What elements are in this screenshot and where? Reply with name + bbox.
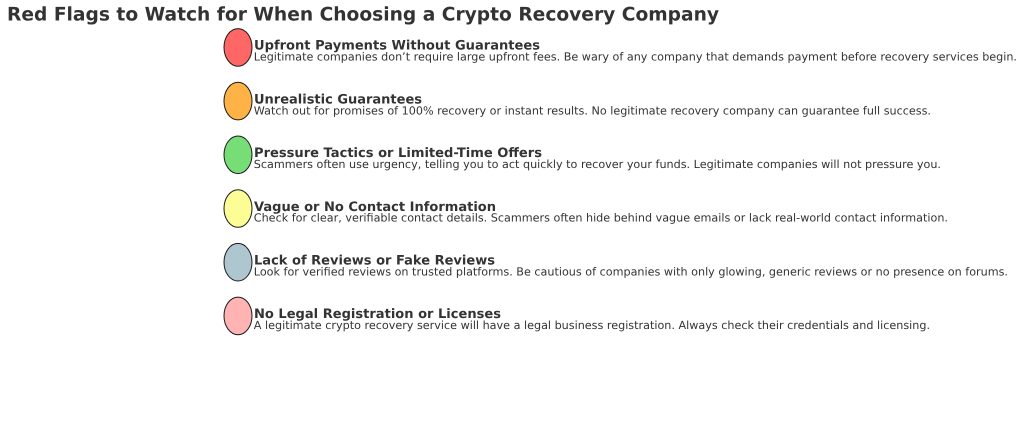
icon: yellow circle: [224, 190, 252, 227]
panel: vague contact information: [224, 190, 948, 227]
panel: pressure tactics: [224, 136, 941, 174]
description: unrealistic guarantees: Watch out for promises of 100% recovery or instant results. No legitimate recovery company can guarantee full success.: [254, 104, 931, 117]
icon: orange circle: [224, 82, 252, 120]
description: legal registration: A legitimate crypto recovery service will have a legal business registration. Always check their credentials and licensing.: [254, 319, 930, 332]
panel: unrealistic guarantees: [224, 82, 931, 120]
description: vague contact information: Check for clear, verifiable contact details. Scammers often hide behind vague emails or lack real-world contact information.: [254, 212, 948, 225]
title: Red Flags to Watch for When Choosing a Crypto Recovery Company: [7, 5, 719, 26]
heading: unrealistic guarantees: Unrealistic Guarantees: [254, 92, 422, 107]
heading: pressure tactics: Pressure Tactics or Limited-Time Offers: [254, 146, 542, 161]
description: reviews: Look for verified reviews on trusted platforms. Be cautious of companies with only glowing, generic reviews or no presence on forums.: [254, 265, 1008, 278]
description: pressure tactics: Scammers often use urgency, telling you to act quickly to recover your funds. Legitimate companies will not pressure you.: [254, 158, 941, 171]
description: upfront payments: Legitimate companies don’t require large upfront fees. Be wary of any company that demands payment before recovery services begin.: [254, 51, 1017, 64]
icon: red circle: [224, 29, 252, 66]
heading: legal registration: No Legal Registration or Licenses: [254, 307, 501, 322]
icon: pink circle: [224, 297, 252, 335]
panel: reviews: [224, 243, 1008, 281]
icon: blue-grey circle: [224, 243, 252, 281]
icon: green circle: [224, 136, 252, 174]
heading: vague contact information: Vague or No Contact Information: [254, 200, 496, 215]
panel: upfront payments: [224, 29, 1017, 66]
panel: legal registration: [224, 297, 930, 335]
heading: reviews: Lack of Reviews or Fake Reviews: [254, 254, 495, 268]
heading: upfront payments: Upfront Payments Without Guarantees: [254, 39, 540, 54]
